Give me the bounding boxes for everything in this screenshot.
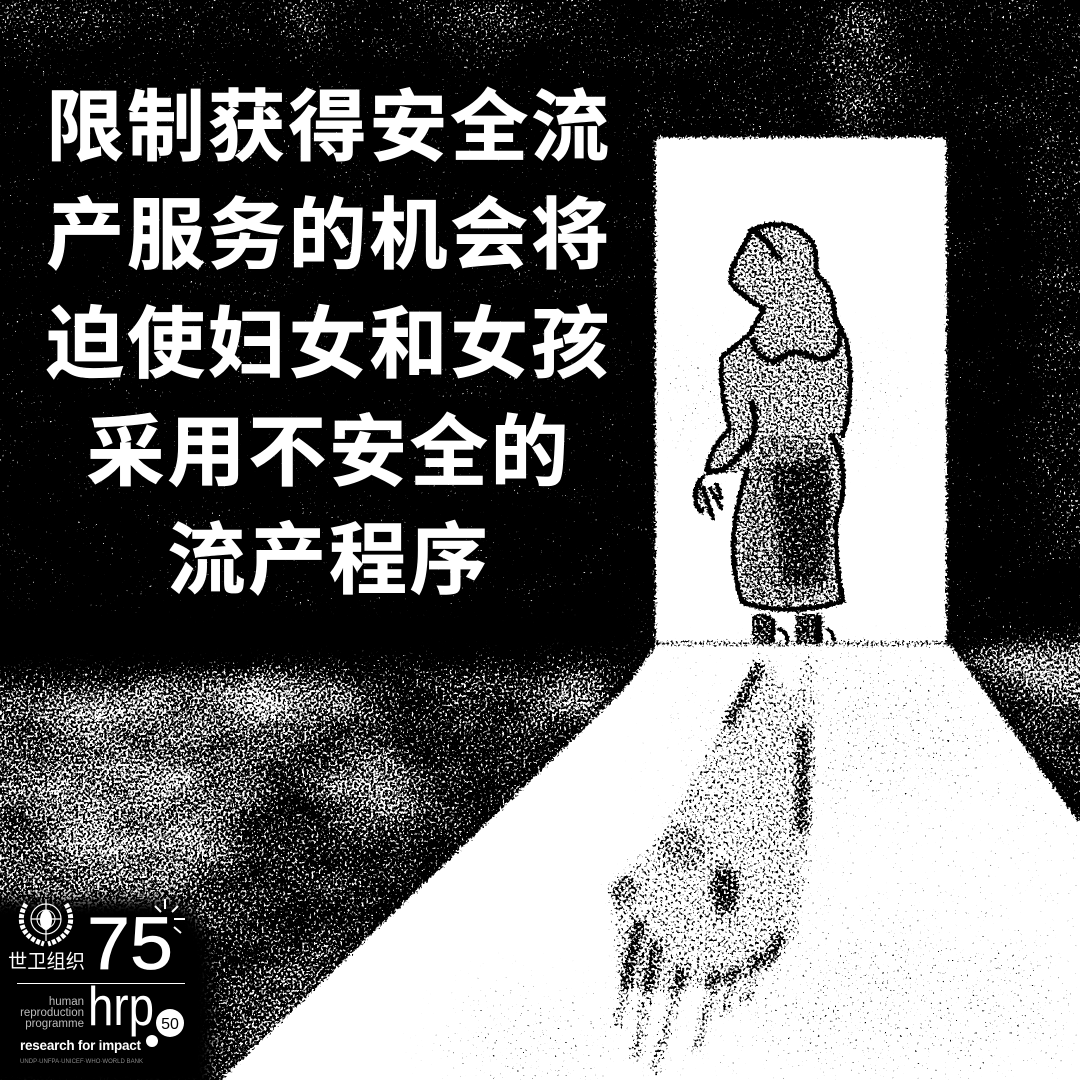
shadow dark core: [711, 865, 739, 915]
tagline: research for impact: [20, 1038, 142, 1053]
shadow streaks: [615, 663, 803, 1075]
headline: 迫使妇女和女孩: [46, 300, 612, 388]
HRP dot: [146, 1035, 158, 1047]
WHO name: 世卫组织: [8, 951, 85, 973]
HRP 50 badge: 50: [161, 1016, 179, 1033]
lit doorway and floor: [180, 138, 1080, 1080]
scattered floor specks: [440, 340, 1080, 1080]
door threshold: [660, 640, 950, 647]
HRP name: [20, 996, 84, 1030]
shadow hand blob: [608, 873, 638, 907]
icon: sparkle rays: [155, 899, 185, 933]
HRP name: human: [49, 996, 84, 1008]
skirt dark centre: [770, 457, 832, 584]
dark panel edge below headline: [0, 610, 640, 668]
HRP name: reproduction: [20, 1007, 84, 1019]
headline: 产服务的机会将: [46, 191, 612, 279]
headline: 限制获得安全流: [46, 83, 612, 171]
HRP wordmark: hrp: [88, 975, 154, 1037]
HRP 50 badge: [156, 1009, 184, 1037]
floor shadow: [607, 650, 817, 1075]
figure outline: [695, 224, 851, 610]
figure upper body: [695, 224, 851, 610]
sponsors: UNDP·UNFPA·UNICEF·WHO·WORLD BANK: [20, 1059, 143, 1065]
headline: 流产程序: [167, 516, 491, 604]
figure shoes: [773, 615, 834, 644]
icon: WHO emblem: [21, 899, 71, 944]
skirt shading: [740, 432, 838, 605]
anniversary 75: 75: [87, 902, 173, 985]
headline: 采用不安全的: [87, 408, 571, 496]
shadow body: [607, 650, 817, 993]
logo block: [8, 899, 185, 1065]
headline: [46, 83, 612, 604]
figure dress shading: [740, 432, 838, 605]
figure legs: [752, 613, 823, 644]
woman figure: [695, 224, 851, 644]
shadow dark cluster: [660, 823, 707, 870]
HRP name: programme: [25, 1018, 84, 1030]
logo divider: [17, 983, 185, 984]
logo backing: [0, 900, 212, 1080]
